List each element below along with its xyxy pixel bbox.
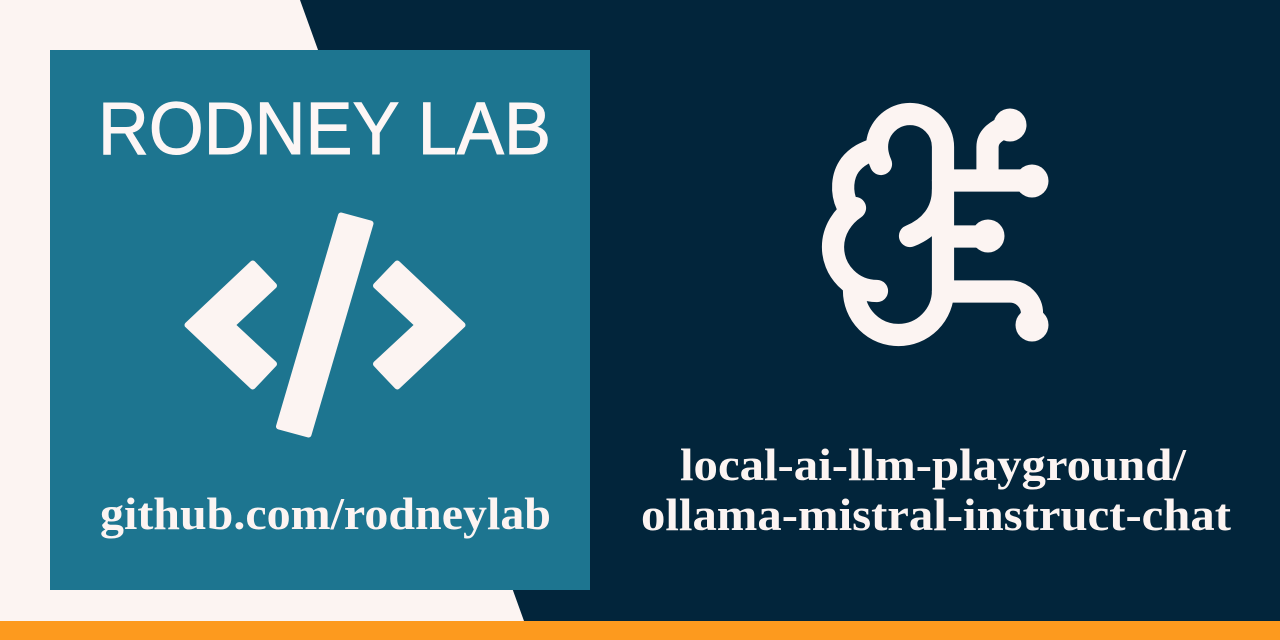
orange footer bar: [0, 621, 1280, 640]
icon: code brackets: [188, 216, 462, 434]
panel: logo: [50, 50, 590, 590]
icon: right chevron: [376, 264, 462, 386]
icon: left chevron: [188, 264, 274, 386]
heading: Rodney Lab: RODNEY LAB: [98, 87, 551, 170]
text: repository path: ollama-mistral-instruct-chat: [641, 489, 1232, 540]
lower left lobe: [833, 208, 877, 291]
text: repository path: [641, 439, 1232, 540]
text: repository path: local-ai-llm-playground/: [680, 439, 1187, 490]
circuit nodes: [972, 108, 1048, 342]
circuit traces: [943, 125, 1032, 325]
upper left lobe: [843, 149, 875, 205]
text: github link: github.com/rodneylab: [100, 488, 551, 539]
inner fold: [910, 190, 943, 236]
icon: slash: [279, 216, 370, 434]
brain outline and centre line: [854, 114, 943, 335]
icon: brain circuit: [833, 108, 1048, 342]
